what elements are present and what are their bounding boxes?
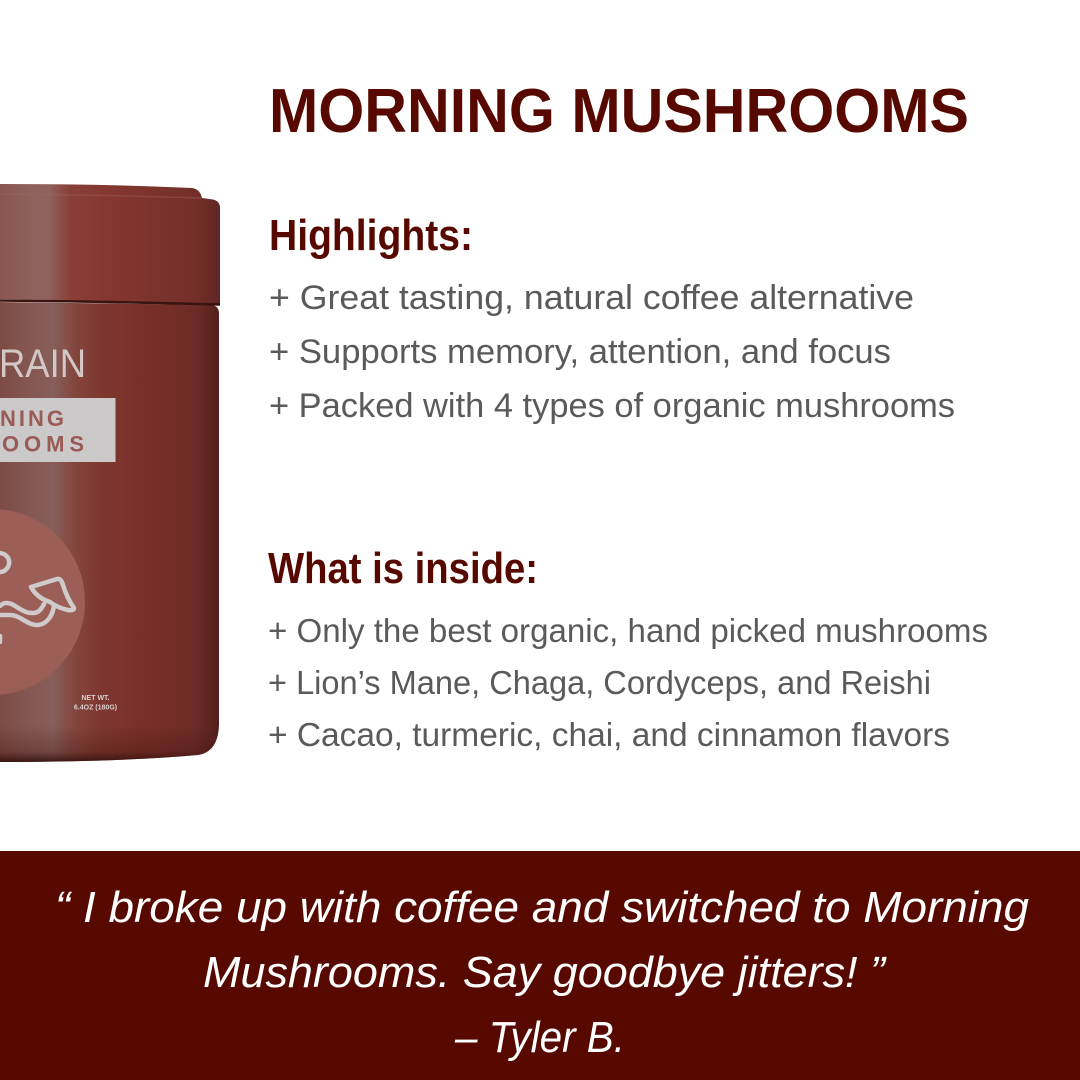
- inside list: + Only the best organic, hand picked mushrooms: [268, 612, 988, 649]
- brand name on jar: RAIN: [0, 342, 86, 386]
- heading: what is inside: What is inside:: [268, 544, 538, 593]
- inside list: + Cacao, turmeric, chai, and cinnamon flavors: [268, 716, 950, 753]
- inside list: [268, 612, 988, 753]
- highlights list: + Packed with 4 types of organic mushrooms: [269, 387, 955, 425]
- product label: OOMS: [2, 432, 84, 456]
- product label: [0, 398, 116, 462]
- product jar: [0, 184, 220, 763]
- testimonial quote: [55, 883, 1030, 1062]
- testimonial quote: Mushrooms. Say goodbye jitters! ”: [203, 948, 887, 997]
- net weight text: NET WT.: [82, 695, 110, 702]
- highlights list: [269, 279, 955, 425]
- highlights list: + Supports memory, attention, and focus: [269, 333, 891, 371]
- net weight text: 6.4OZ (180G): [74, 704, 117, 712]
- heading: highlights: Highlights:: [269, 211, 473, 260]
- net weight text: [74, 695, 117, 712]
- mushroom badge: [0, 509, 85, 695]
- testimonial quote: – Tyler B.: [454, 1013, 625, 1062]
- title: MORNING MUSHROOMS: [269, 77, 969, 146]
- jar lid: [0, 184, 220, 304]
- inside list: + Lion’s Mane, Chaga, Cordyceps, and Reishi: [268, 664, 931, 701]
- jar body: [0, 300, 220, 763]
- testimonial quote: “ I broke up with coffee and switched to Morning: [55, 883, 1030, 932]
- section: what is inside: [268, 544, 988, 753]
- product label: NING: [0, 406, 67, 431]
- testimonial band: [0, 851, 1080, 1080]
- highlights list: + Great tasting, natural coffee alternative: [269, 279, 914, 317]
- section: highlights: [269, 211, 955, 425]
